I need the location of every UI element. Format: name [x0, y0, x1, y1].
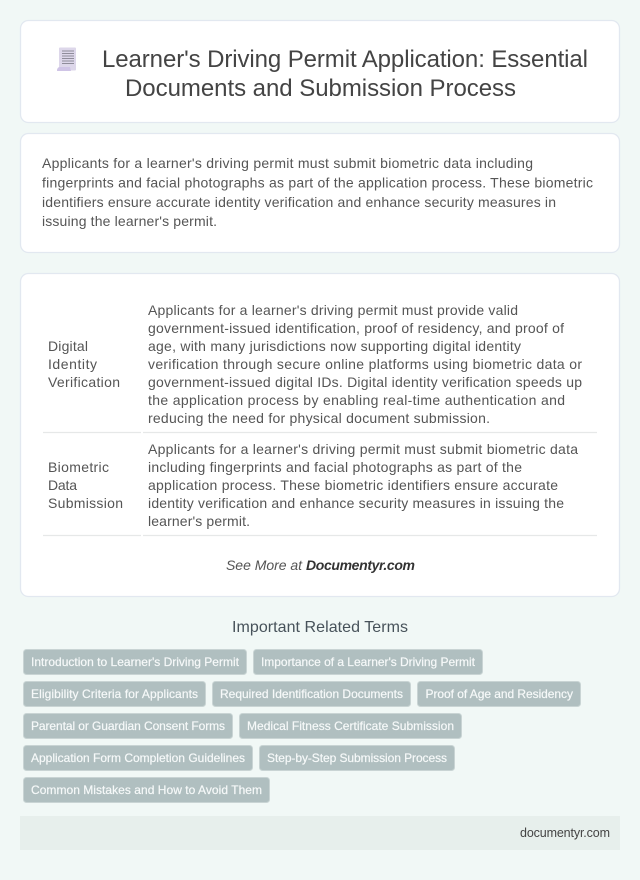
- row: digital identity verification: Identity: [48, 356, 97, 372]
- row: digital identity verification: [48, 302, 582, 426]
- tag: [260, 746, 454, 770]
- tag: Medical Fitness Certificate Submission: [247, 719, 454, 733]
- tag: [24, 778, 270, 802]
- intro paragraph: [42, 155, 593, 229]
- row: digital identity verification: age, with many jurisdictions now supporting digital identity: [148, 338, 521, 354]
- tag: Importance of a Learner's Driving Permit: [261, 655, 476, 669]
- panel: details table: [20, 274, 620, 596]
- row: biometric data submission: [48, 441, 578, 529]
- row: digital identity verification: government-issued digital IDs. Digital identity verification speeds up: [148, 374, 582, 390]
- see more link: [226, 557, 415, 573]
- row: biometric data submission: learner's permit.: [148, 513, 250, 529]
- row: digital identity verification: the application process by enabling real-time authentication and: [148, 392, 565, 408]
- tag: [254, 650, 482, 674]
- see more link: Documentyr.com: [306, 557, 415, 573]
- title: [102, 46, 588, 102]
- tag: [24, 746, 252, 770]
- see more link: See More at: [226, 557, 303, 573]
- row: biometric data submission: Data: [48, 477, 77, 493]
- tag: [24, 682, 206, 706]
- row: digital identity verification: verification through secure online platforms using biometric data or: [148, 356, 582, 372]
- tag: Parental or Guardian Consent Forms: [31, 719, 225, 733]
- tag: Common Mistakes and How to Avoid Them: [31, 783, 262, 797]
- tag: Eligibility Criteria for Applicants: [31, 687, 198, 701]
- panel: related term tags: [24, 650, 580, 802]
- tag: Application Form Completion Guidelines: [31, 751, 245, 765]
- tag: [212, 682, 410, 706]
- row: biometric data submission: Submission: [48, 495, 123, 511]
- intro paragraph: Applicants for a learner's driving permit must submit biometric data including: [42, 155, 533, 171]
- intro paragraph: identifiers ensure accurate identity verification and enhance security measures in: [42, 194, 556, 210]
- tag: Introduction to Learner's Driving Permit: [31, 655, 240, 669]
- row: biometric data submission: including fingerprints and facial photographs as part of the: [148, 459, 522, 475]
- row: digital identity verification: Digital: [48, 338, 88, 354]
- title: Documents and Submission Process: [125, 75, 516, 102]
- row: biometric data submission: application process. These biometric identifiers ensure accurate: [148, 477, 558, 493]
- intro paragraph: fingerprints and facial photographs as part of the application process. These biometric: [42, 174, 593, 190]
- tag: [418, 682, 580, 706]
- panel: introduction: [20, 134, 620, 252]
- tag: Proof of Age and Residency: [426, 687, 573, 701]
- row: biometric data submission: Biometric: [48, 459, 109, 475]
- row: digital identity verification: Applicants for a learner's driving permit must provide valid: [148, 302, 518, 318]
- footer bar: [20, 816, 620, 850]
- tag: [24, 650, 246, 674]
- row: biometric data submission: Applicants for a learner's driving permit must submit biometric data: [148, 441, 578, 457]
- intro paragraph: issuing the learner's permit.: [42, 213, 217, 229]
- panel: title header: [20, 20, 620, 122]
- row: digital identity verification: Verification: [48, 374, 120, 390]
- tag: [24, 714, 232, 738]
- title: Learner's Driving Permit Application: Essential: [102, 46, 588, 73]
- row: biometric data submission: identity verification and enhance security measures in issuing the: [148, 495, 564, 511]
- row: digital identity verification: government-issued identification, proof of residency, and proof of: [148, 320, 564, 336]
- icon: document scroll: [57, 48, 76, 71]
- tag: [240, 714, 462, 738]
- tag: Required Identification Documents: [220, 687, 403, 701]
- tag: Step-by-Step Submission Process: [267, 751, 447, 765]
- row: digital identity verification: reducing the need for physical document submission.: [148, 410, 490, 426]
- footer bar: documentyr.com: [520, 826, 610, 840]
- heading: important related terms: Important Related Terms: [232, 619, 408, 636]
